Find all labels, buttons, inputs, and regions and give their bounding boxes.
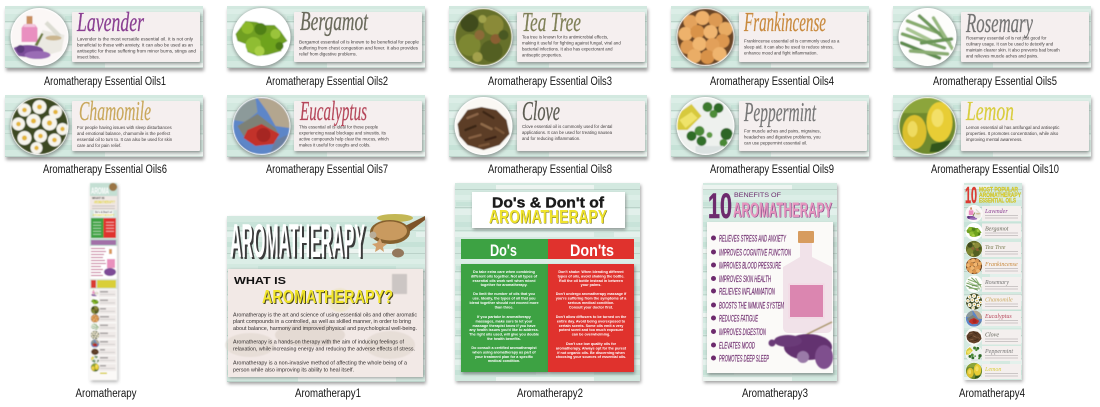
label: Aromatherapy: Aromatherapy (76, 388, 137, 400)
card: Clove (449, 95, 648, 160)
title box: Do's & Don't of (492, 196, 604, 212)
label: Aromatherapy1: Aromatherapy1 (295, 388, 361, 400)
panel: what is aromatherapy (225, 269, 424, 378)
panel: don'ts list: your palms. (581, 283, 601, 287)
card: Rosemary: maintain clearer skin. It also prevents bad breath (966, 48, 1060, 52)
card: Chamomile: Chamomile (79, 96, 151, 126)
benefits text: RELIEVES INFLAMMATION (719, 286, 775, 296)
panel: don'ts list: Roll the oil bottle instead in between (559, 279, 624, 283)
panel: don'ts list: you're suffering from the symptoms of a (556, 296, 627, 300)
benefits text: PROMOTES DEEP SLEEP (719, 354, 769, 364)
column header: Do's (461, 239, 548, 260)
panel: do's list: than three. (495, 305, 513, 309)
label: Aromatherapy Essential Oils10: Aromatherapy Essential Oils10 (931, 164, 1059, 176)
card: Lavender: antiseptic for those suffering from minor burns, stings and (77, 48, 197, 54)
text: AROMATHERAPY (232, 216, 367, 269)
benefits text: IMPROVES DIGESTION (719, 327, 766, 337)
mini header (90, 183, 117, 196)
panel: do's list: medical condition. (488, 359, 520, 363)
panel: do's list: Do limit the number of oils that you (473, 292, 536, 296)
panel: don'ts list: entire day. Avoid being overexposed to (557, 319, 626, 323)
card: Bergamot: suffering from chest congestion and fever. It also provides (299, 46, 419, 50)
card: Eucalyptus: experiencing nasal blockage and sinusitis. Its (299, 130, 387, 136)
panel: do's list: your treatment plan for a specific (475, 355, 533, 359)
card: Lemon: properties. It promotes concentration, while also (966, 131, 1059, 136)
card: Clove: Clove essential oil is commonly used for dental (522, 124, 612, 129)
panel: do's list: The right oils used, will give you double (469, 333, 539, 337)
card: Chamomile: care and for pain relief. (77, 143, 121, 148)
poster: 10 most popular essential oils: 10 (965, 182, 977, 208)
label: Aromatherapy Essential Oils6: Aromatherapy Essential Oils6 (43, 164, 167, 176)
title box (472, 192, 626, 230)
title: most popular essential oils: AROMATHERAPY (979, 192, 1021, 199)
panel: don'ts list: Don't use low quality oils for (566, 342, 617, 346)
oil rows: Rosemary (984, 280, 1009, 286)
oil rows: Frankincense (984, 262, 1018, 268)
heading: WHAT IS (234, 275, 286, 287)
panel: do's list: blend together should not exceed more (469, 301, 539, 305)
card: Rosemary: Rosemary essential oil is not just good for (966, 36, 1047, 40)
panel: do's list: when using aromatherapy as part of (471, 350, 536, 354)
label: Aromatherapy Essential Oils8: Aromatherapy Essential Oils8 (488, 164, 612, 176)
panel: don'ts list: potent scent and too much exposure (559, 328, 623, 332)
panel: don'ts list: Consult your doctor first. (569, 305, 613, 309)
card: Eucalyptus: active compounds help clear the mucus, which (299, 136, 389, 142)
card: Chamomile: For people having issues with sleep disturbances (77, 125, 172, 130)
benefits text (719, 234, 791, 364)
panel: do's list: the health benefits. (487, 337, 521, 341)
panel: do's list: any health issues you'd like to address. (469, 328, 539, 332)
mini what-is panel: WHAT IS (92, 196, 104, 200)
title: 10: 10 (708, 187, 732, 226)
oil rows: Eucalyptus (984, 314, 1012, 320)
card: Lavender (5, 6, 204, 71)
card: Peppermint: Peppermint (743, 97, 817, 127)
panel: don'ts list: Don't undergo aromatherapy massage if (556, 292, 627, 296)
card: Frankincense: sleep aid. It can also be used to reduce stress, (744, 44, 834, 50)
card: Bergamot: Bergamot essential oil is known to be beneficial for people (299, 40, 420, 44)
panel: do's list: different oils together. Not all types of (471, 274, 538, 278)
panel: don'ts list: Don't shake: When blending different (558, 270, 624, 274)
benefits text: IMPROVES BLOOD PRESSURE (719, 260, 781, 270)
poster: 10 Benefits of Aromatherapy (703, 183, 838, 383)
mini what-is panel (90, 196, 117, 210)
panel: do's list: massages, make sure to let your (476, 319, 533, 323)
panel: do's list: If you partake in aromatherapy (477, 315, 532, 319)
card: Eucalyptus: makes it useful for coughs and colds. (299, 142, 370, 148)
oil rows: Chamomile (985, 298, 1013, 304)
poster: Aromatherapy long thumbnail (90, 183, 118, 382)
mini do's and don'ts: AROMATHERAPY (92, 213, 115, 217)
card: Peppermint: headaches and digestive problems, you (744, 134, 821, 140)
body text: Aromatherapy is a non-invasive method of affecting the whole being of a (233, 360, 407, 366)
card: Frankincense: Frankincense (743, 7, 826, 37)
benefits text: IMPROVES SKIN HEALTH (719, 274, 771, 284)
label: Aromatherapy Essential Oils7: Aromatherapy Essential Oils7 (266, 164, 388, 176)
label: Aromatherapy Essential Oils3: Aromatherapy Essential Oils3 (488, 76, 612, 88)
heading: yellow: AROMATHERAPY? (263, 288, 394, 308)
poster: Do's and Don'ts (455, 183, 641, 383)
card: Chamomile (5, 95, 204, 160)
panel: benefits list: IMPROVES COGNITIVE FUNCTION (719, 248, 791, 258)
card: Tea Tree: making it useful for fighting against fungal, viral and (522, 40, 621, 46)
title: aromatherapy: AROMATHERAPY (734, 200, 833, 223)
card: Clove: applications. It can be used for treating nausea (522, 130, 613, 135)
panel: don'ts list (548, 264, 635, 374)
card: Rosemary: and relieves muscle aches and pains. (966, 54, 1038, 58)
title: benefits of: BENEFITS OF (734, 193, 781, 199)
column header: Don'ts: Don'ts (570, 241, 614, 260)
column header: Do's: Do's (490, 241, 517, 260)
card: Peppermint (671, 95, 870, 160)
bullets (711, 236, 716, 360)
icon: bottle (783, 231, 832, 333)
panel: don'ts list: certain scents. Some oils emit a very (559, 324, 624, 328)
title: aromatherapy: AROMATHERAPY (733, 199, 832, 222)
panel: don'ts list: if not organic oils. Be discerning when (557, 351, 626, 355)
mini oil rows (91, 289, 116, 372)
title box: AROMATHERAPY (490, 208, 608, 228)
card: Rosemary: culinary usage. It can be used to detoxify and (966, 42, 1054, 46)
card: Clove: Clove (522, 96, 560, 126)
card: Lavender: Lavender (76, 7, 144, 37)
card: Frankincense: Frankincense essential oil is commonly used as a (744, 38, 840, 44)
label: Aromatherapy2: Aromatherapy2 (517, 388, 583, 400)
oil rows: Bergamot (985, 226, 1009, 232)
oil rows: Lemon (984, 367, 1001, 373)
mini what-is panel: AROMATHERAPY? (94, 200, 115, 204)
body text: plant compounds in a controlled, as well as skilled manner, in order to bring (233, 319, 411, 325)
body text (233, 312, 417, 374)
card: Tea Tree: antiseptic properties. (522, 52, 562, 58)
card: Lemon: Lemon (965, 96, 1014, 126)
card: Tea Tree: Tea Tree (522, 7, 581, 37)
panel: don'ts list: Don't allow diffusers to be turned on the (556, 315, 626, 319)
body text: relaxation, while increasing energy and reducing the adverse effects of stress. (233, 346, 415, 352)
card: Eucalyptus (227, 95, 426, 160)
mini benefits (90, 239, 117, 278)
mini footer (100, 372, 107, 374)
benefits text: ELEVATES MOOD (719, 340, 755, 350)
panel: do's list: together for aromatherapy. (481, 283, 528, 287)
card: Eucalyptus: This essential oil is ideal for those people (299, 124, 379, 130)
title box: AROMATHERAPY (489, 207, 607, 227)
body text: Aromatherapy is the art and science of using essential oils and other aromatic (233, 312, 417, 318)
body text: person while also improving its ability to heal itself. (233, 368, 354, 374)
panel: don'ts list: aromatherapy. Always opt for the purest (556, 346, 627, 350)
benefits text: REDUCES FATIGUE (719, 314, 758, 324)
poster: 10 most popular essential oils (964, 182, 1023, 382)
card: Rosemary (893, 6, 1092, 71)
panel: benefits list (707, 222, 834, 375)
card: Bergamot: Bergamot (300, 6, 369, 36)
title: most popular essential oils: ESSENTIAL OILS (979, 198, 1016, 204)
label: Aromatherapy Essential Oils2: Aromatherapy Essential Oils2 (266, 76, 388, 88)
title: most popular essential oils (979, 186, 1021, 204)
card: Rosemary: Rosemary (965, 8, 1033, 38)
panel: don'ts list: types of oils, avoid shaking the bottle. (558, 274, 624, 278)
benefits text: RELIEVES STRESS AND ANXIETY (719, 234, 786, 244)
heading: yellow: AROMATHERAPY? (262, 287, 393, 307)
mini do's and don'ts (90, 210, 117, 239)
card: Lemon: improving mental awareness. (966, 137, 1022, 142)
card: Lavender: beneficial to those with anxiety. It can also be used as an (77, 42, 194, 48)
mini popular oils banner (90, 279, 117, 289)
card: Tea Tree: Tea tree is known for its antimicrobial effects, (522, 34, 608, 40)
label: Aromatherapy Essential Oils5: Aromatherapy Essential Oils5 (933, 76, 1057, 88)
title: most popular essential oils: MOST POPULAR (979, 186, 1018, 194)
panel: don'ts list: choosing your sources of essential oils. (556, 355, 626, 359)
card: Chamomile: essential oil to turn to. It can also be used for skin (77, 137, 173, 142)
label: Aromatherapy Essential Oils1: Aromatherapy Essential Oils1 (44, 76, 166, 88)
label: Aromatherapy Essential Oils9: Aromatherapy Essential Oils9 (710, 164, 834, 176)
column header: Don'ts (548, 239, 634, 260)
panel: do's list: essential oils work well when mixed (473, 279, 536, 283)
panel: do's list: Do consult a certified aromatherapist (471, 346, 537, 350)
icon: bowl and shells (370, 214, 425, 258)
oil rows: Clove (985, 332, 999, 338)
card: Clove: and for reducing inflammation. (522, 136, 580, 141)
panel: don'ts list: serious medical condition. (568, 301, 614, 305)
icon: faded flowers (225, 274, 415, 359)
body text: about balance, harmony and improved physical and psychological well-being. (233, 326, 417, 332)
card: Lavender: insect bites. (77, 54, 100, 60)
title: aromatherapy (733, 199, 833, 223)
card: Bergamot (227, 6, 426, 71)
mini header: AROMA (91, 186, 109, 196)
panel: do's list: massage therapist know if you have (472, 324, 536, 328)
card: Frankincense: enhance mood and fight inflammation. (744, 50, 818, 56)
card: Lemon (893, 95, 1092, 160)
card: Lavender: Lavender is the most versatile essential oil. It is not only (77, 36, 194, 42)
label: Aromatherapy Essential Oils4: Aromatherapy Essential Oils4 (710, 76, 834, 88)
card: Peppermint: For muscle aches and pains, migraines, (744, 128, 821, 134)
card: Eucalyptus: Eucalyptus (299, 96, 367, 126)
panel: do's list: use. Ideally, the types of oil that you (472, 296, 536, 300)
panel: don'ts list: can be overwhelming. (572, 333, 610, 337)
card: Lemon: Lemon essential oil has antifungal and antiseptic (966, 125, 1060, 130)
oil rows: Lavender (984, 209, 1008, 215)
oil rows: Peppermint (984, 349, 1013, 355)
panel: do's list (461, 264, 549, 374)
card: Tea Tree (449, 6, 648, 71)
text: AROMATHERAPY (230, 214, 365, 267)
icon: lavender bunch (768, 322, 833, 369)
title (230, 214, 367, 269)
label: Aromatherapy3: Aromatherapy3 (742, 388, 808, 400)
mini do's and don'ts: Do's & Don't of (95, 211, 112, 214)
panel: do's list: Do take extra care when combining (473, 270, 535, 274)
card: Chamomile: and emotional balance, chamomile is the perfect (77, 131, 171, 136)
card: Tea Tree: bacterial infections. It also has expectorant and (522, 46, 613, 52)
poster: What is Aromatherapy (225, 214, 426, 384)
benefits text: BOOSTS THE IMMUNE SYSTEM (719, 300, 784, 310)
body text: Aromatherapy is a hands-on therapy with the aim of inducing feelings of (233, 340, 404, 346)
card: Bergamot: relief from digestive problems. (299, 52, 357, 56)
card: Frankincense (671, 6, 870, 71)
label: Aromatherapy4: Aromatherapy4 (959, 388, 1026, 400)
card: Peppermint: can use peppermint essential oil. (744, 140, 807, 146)
oil rows (966, 205, 1021, 380)
oil rows: Tea Tree (985, 245, 1006, 251)
